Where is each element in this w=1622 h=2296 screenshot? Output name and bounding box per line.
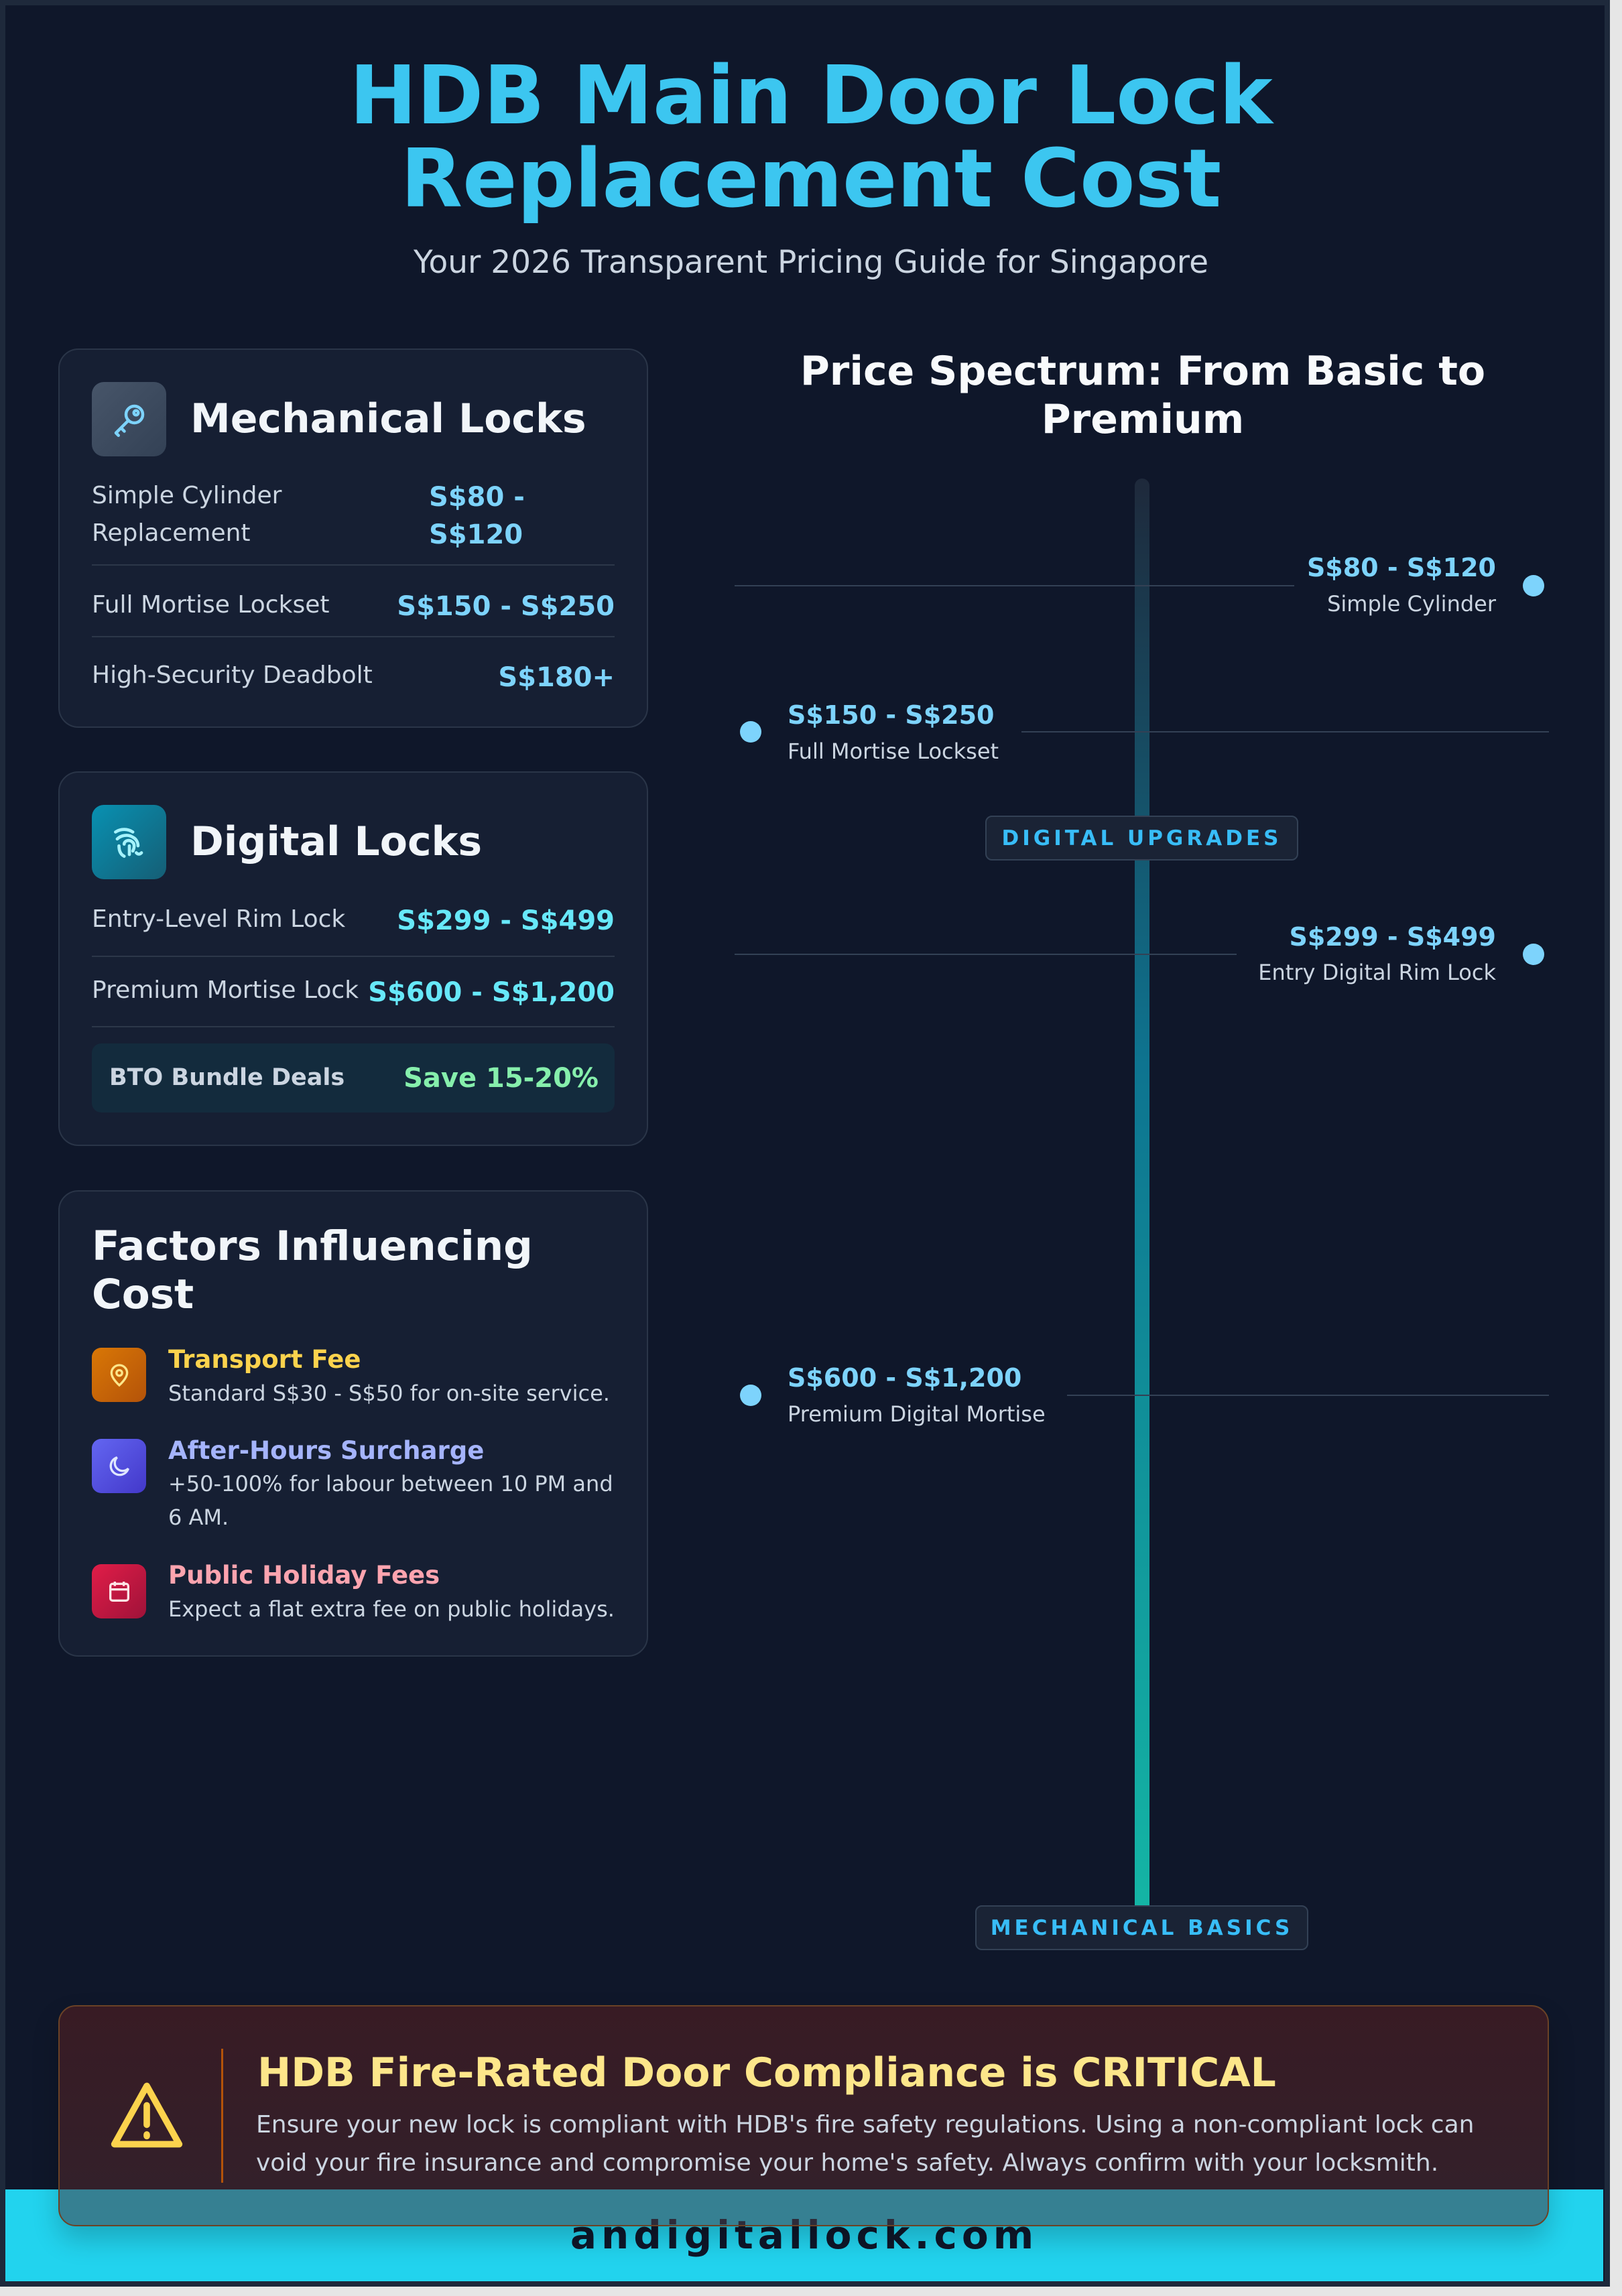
badge: digital upgrades [985,816,1298,860]
panel: mechanical locks: S$80 - [429,482,525,513]
heading: Mechanical Locks [190,395,586,442]
icon: fingerprint [92,805,166,879]
heading: Digital Locks [190,818,482,865]
subtitle: Your 2026 Transparent Pricing Guide for Singapore [414,244,1208,281]
badge: mechanical basics [975,1905,1308,1950]
callout: bto bundle: Save 15-20% [403,1063,599,1094]
panel: mechanical locks: S$150 - S$250 [397,591,615,622]
item: simple cylinder [735,553,1544,617]
row: simple cylinder [92,482,282,547]
item: premium digital mortise: Premium Digital Mortise [788,1401,1046,1427]
row: deadbolt: High-Security Deadbolt [92,661,373,689]
icon: calendar [92,1564,146,1618]
heading: Cost [92,1271,194,1318]
title: HDB Main Door Lock [349,50,1273,143]
panel: digital locks [58,771,648,1146]
factor: after-hours [92,1436,613,1530]
title [349,50,1274,226]
row: rim lock: Entry-Level Rim Lock [92,905,345,933]
icon: warning [111,2083,182,2147]
row: premium mortise: Premium Mortise Lock [92,976,359,1004]
item: entry digital rim [735,922,1544,985]
panel: factors [58,1190,648,1657]
row: simple cylinder: Simple Cylinder [92,482,282,509]
item: premium digital mortise: S$600 - S$1,200 [788,1363,1021,1393]
factor: after-hours: +50-100% for labour between 10 PM and 6 AM. [168,1471,613,1530]
footer [5,2189,1603,2281]
factor: transport [92,1345,610,1406]
factor: public holiday: Expect a flat extra fee on public holidays. [168,1596,615,1622]
callout: bto bundle [92,1043,615,1112]
panel: mechanical locks: S$120 [429,519,523,550]
callout: fire-rated compliance warning [58,2005,1549,2226]
panel: digital locks: S$299 - S$499 [397,905,615,936]
factor: after-hours: After-Hours Surcharge [168,1436,484,1465]
item: simple cylinder: Simple Cylinder [1327,591,1496,617]
panel: mechanical locks: S$180+ [498,662,615,693]
item: full mortise [740,700,1549,764]
callout: bto bundle: BTO Bundle Deals [109,1064,345,1091]
warning title: HDB Fire-Rated Door Compliance is CRITICAL [257,2049,1276,2096]
factor: public holiday: Public Holiday Fees [168,1561,440,1590]
row: simple cylinder: Replacement [92,519,251,547]
vertical bar [1135,479,1149,1947]
panel: mechanical locks [58,348,648,728]
icon: moon [92,1439,146,1493]
factor: transport: Standard S$30 - S$50 for on-site service. [168,1381,610,1406]
panel: digital locks: S$600 - S$1,200 [368,977,615,1008]
factor: public holiday [92,1561,615,1622]
title: Replacement Cost [401,133,1221,226]
heading: Factors Influencing [92,1222,533,1270]
badge: digital upgrades: DIGITAL UPGRADES [1002,826,1282,850]
item: entry digital rim: S$299 - S$499 [1290,922,1496,952]
heading: price spectrum: Premium [1042,396,1244,443]
item: premium digital mortise [740,1363,1549,1427]
item: full mortise: Full Mortise Lockset [788,739,999,764]
item: entry digital rim: Entry Digital Rim Lock [1258,960,1496,985]
warning body: Ensure your new lock is compliant with HDB's fire safety regulations. Using a non-compliant lock can void your fire insurance and compromise your home's safety. Always confirm with your locksmith. [256,2111,1474,2177]
chart: price spectrum timeline [735,479,1549,1950]
badge: mechanical basics: MECHANICAL BASICS [991,1915,1293,1939]
icon: location [92,1348,146,1402]
row: full mortise: Full Mortise Lockset [92,591,329,619]
heading [92,1222,533,1318]
item: full mortise: S$150 - S$250 [788,700,995,730]
footer url: andigitallock.com [570,2212,1038,2258]
item: simple cylinder: S$80 - S$120 [1307,553,1496,582]
icon: key [92,382,166,456]
heading: price spectrum [800,348,1485,443]
heading: price spectrum: Price Spectrum: From Basic to [800,348,1485,395]
factor: transport: Transport Fee [168,1345,361,1374]
